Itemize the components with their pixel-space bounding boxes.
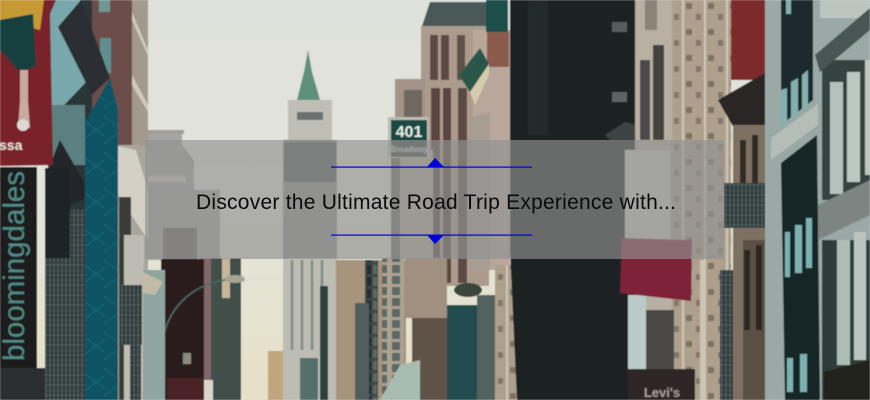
401 Broadway sign: Broadway — [390, 145, 429, 154]
top blue divider with up arrow — [331, 158, 532, 168]
pale building and green flag — [459, 0, 510, 270]
black sign panel — [0, 167, 45, 400]
distant buildings lower left — [200, 258, 241, 400]
teal scaffold netting — [85, 78, 118, 400]
tall tan building and roof — [391, 2, 489, 318]
brick building top left — [90, 0, 148, 146]
tan mid building — [336, 258, 406, 400]
teal-grey building with tall windows — [765, 0, 870, 400]
red top building and dark cornice — [718, 0, 768, 400]
bottom blue divider with down arrow — [331, 234, 532, 244]
red banner — [0, 0, 56, 166]
lower storefront buildings — [380, 265, 517, 400]
title text: Discover the Ultimate Road Trip Experience with... — [196, 191, 676, 214]
distant grey building — [146, 130, 220, 260]
Levi's banner — [628, 369, 695, 400]
white cornice building — [118, 145, 165, 400]
dark brick building — [161, 259, 204, 400]
red flag — [620, 238, 692, 301]
distant tan tower — [268, 351, 283, 400]
401 Broadway sign: 401 — [396, 124, 422, 141]
light teal building with fire escape — [45, 0, 110, 400]
Levi's banner: Levi's — [644, 385, 680, 400]
translucent title band — [145, 140, 724, 259]
woolworth tower — [283, 50, 337, 400]
street lamp — [162, 279, 232, 345]
401 Broadway sign — [388, 117, 429, 158]
beige stone building with windows — [625, 0, 740, 400]
dark central building — [510, 0, 640, 400]
